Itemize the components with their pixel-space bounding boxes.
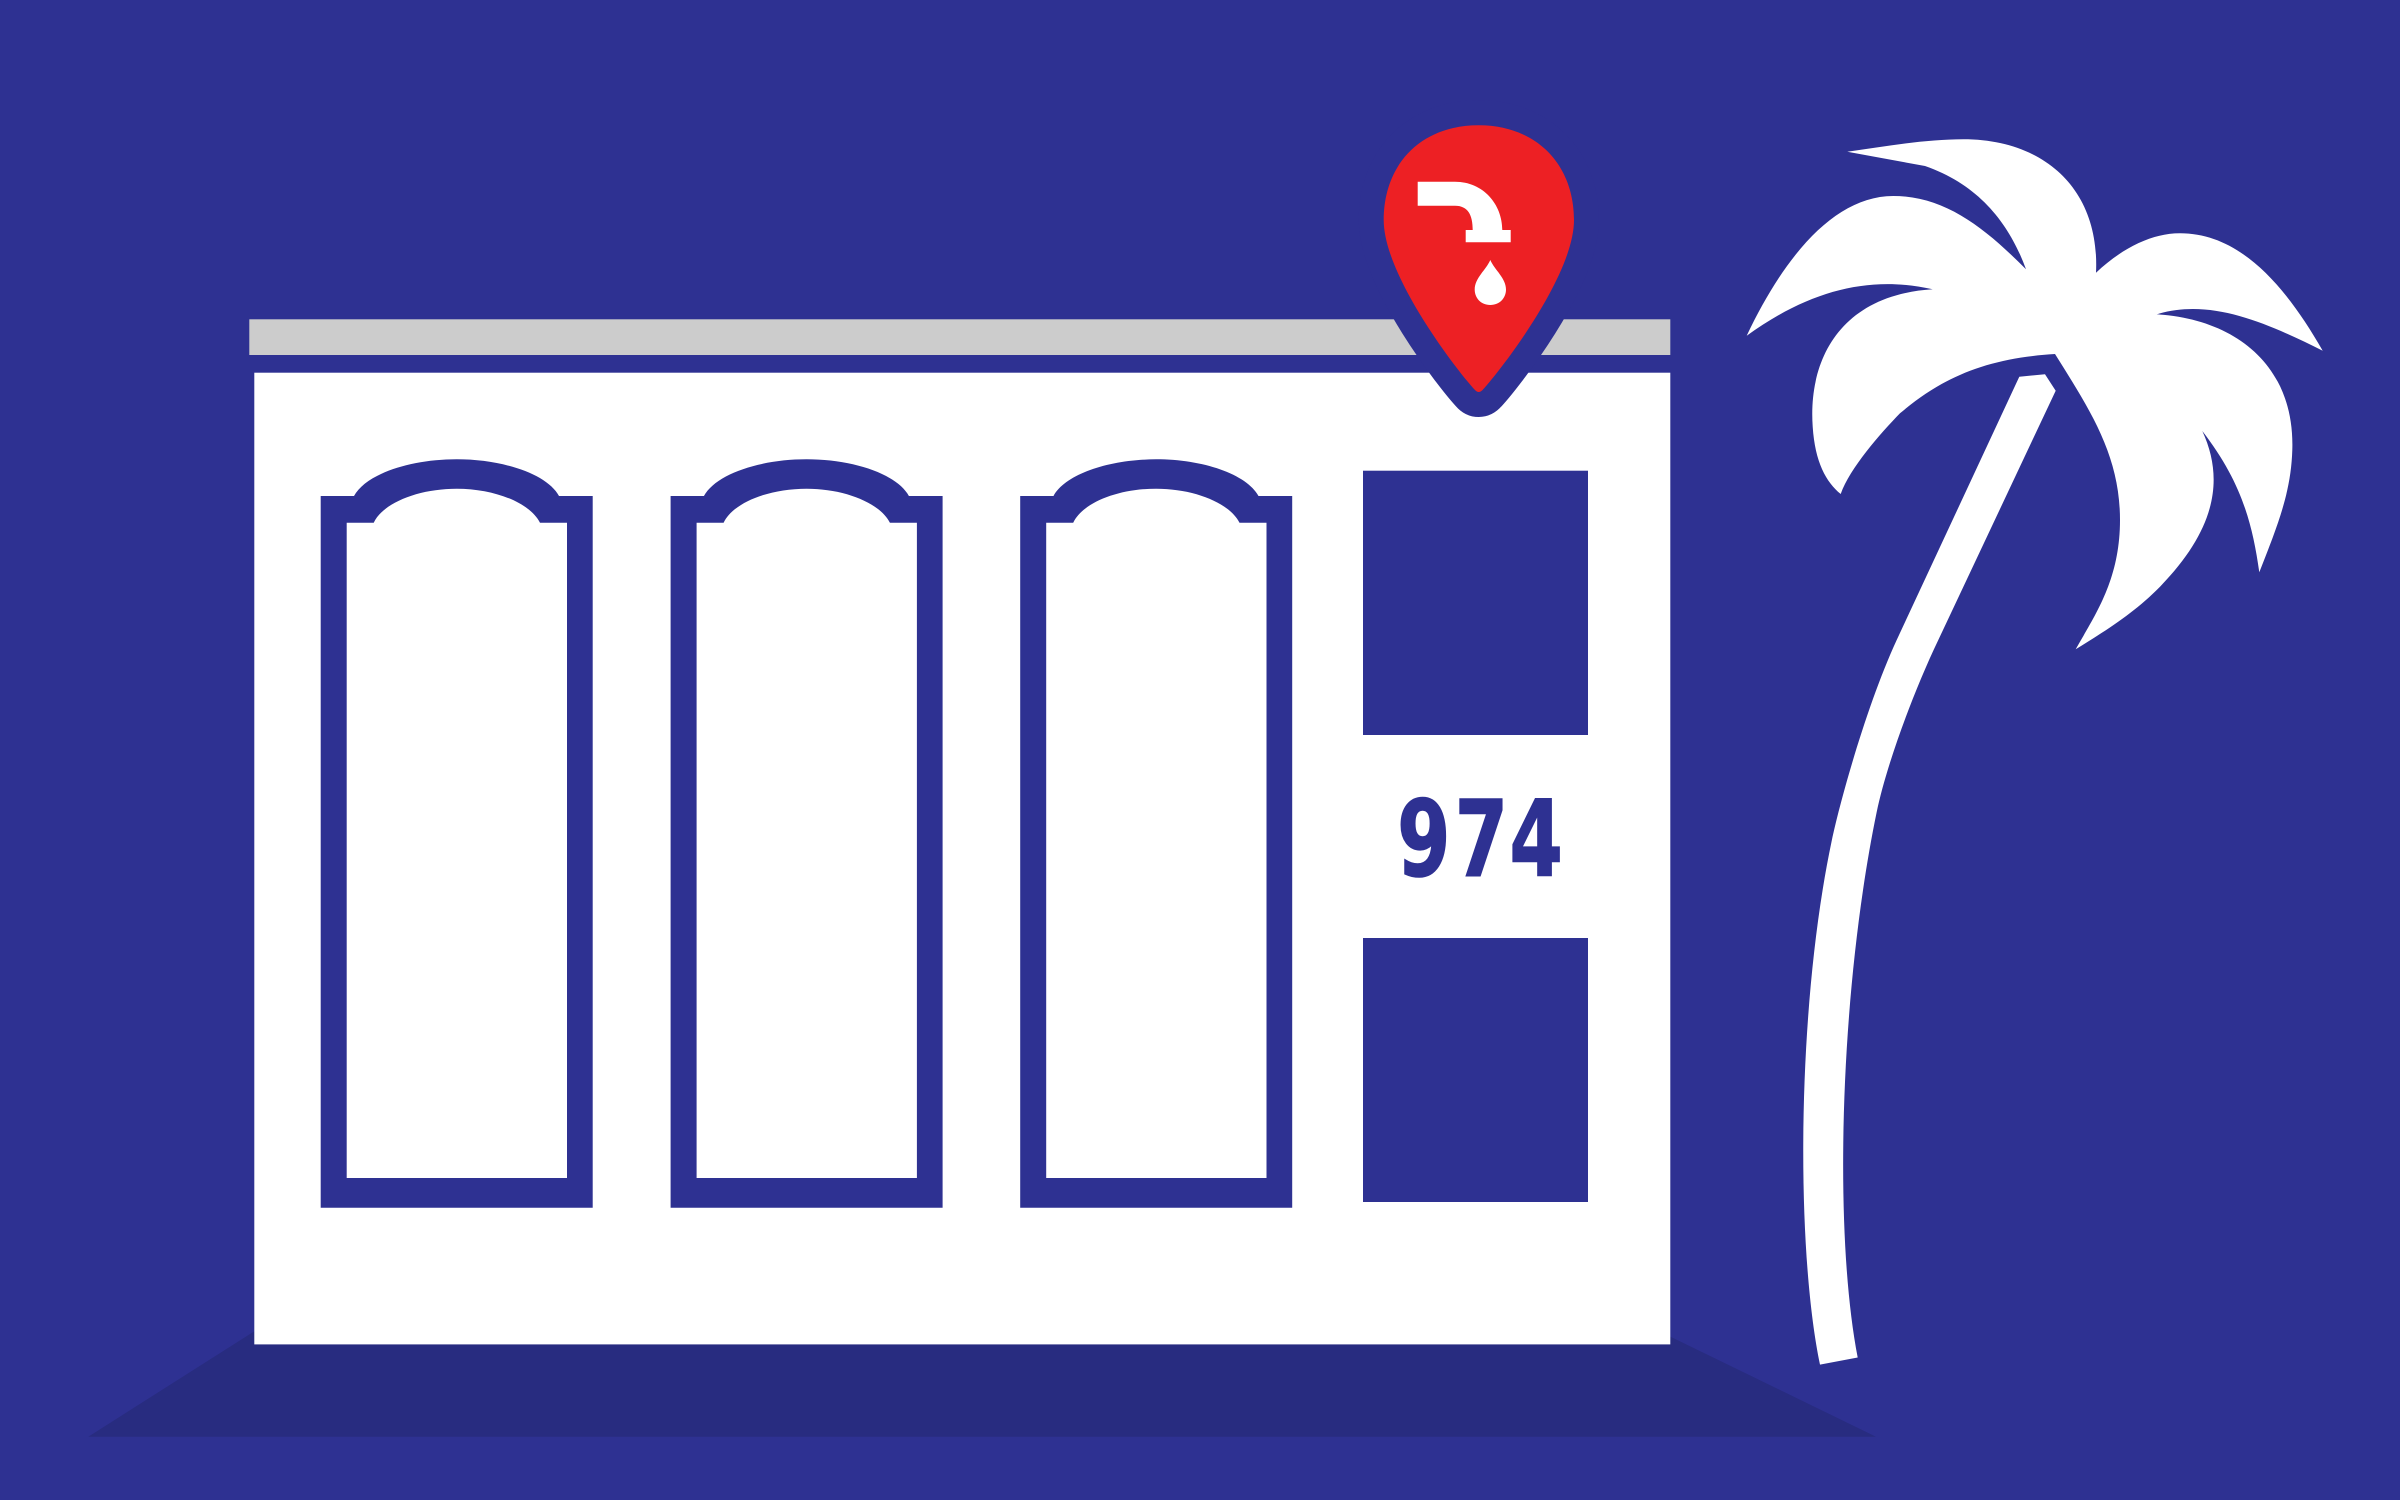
arched window 1 [321, 459, 593, 1208]
icon: water drop [1475, 260, 1506, 305]
arched window 2 [671, 459, 943, 1208]
house number: 974 [1397, 778, 1563, 900]
building [249, 319, 1670, 1344]
map pin with faucet [1384, 125, 1574, 392]
ground shadow [88, 1332, 1876, 1437]
palm tree [1747, 139, 2323, 1365]
lower square window [1363, 938, 1588, 1202]
palm trunk [1803, 374, 2056, 1365]
building wall [254, 373, 1670, 1344]
palm fronds [1747, 139, 2323, 649]
arched window 3 [1020, 459, 1292, 1208]
pin body [1384, 125, 1574, 392]
upper square window [1363, 471, 1588, 735]
pin outline [1384, 125, 1574, 392]
icon: faucet [1418, 182, 1511, 242]
roof band [249, 319, 1670, 355]
